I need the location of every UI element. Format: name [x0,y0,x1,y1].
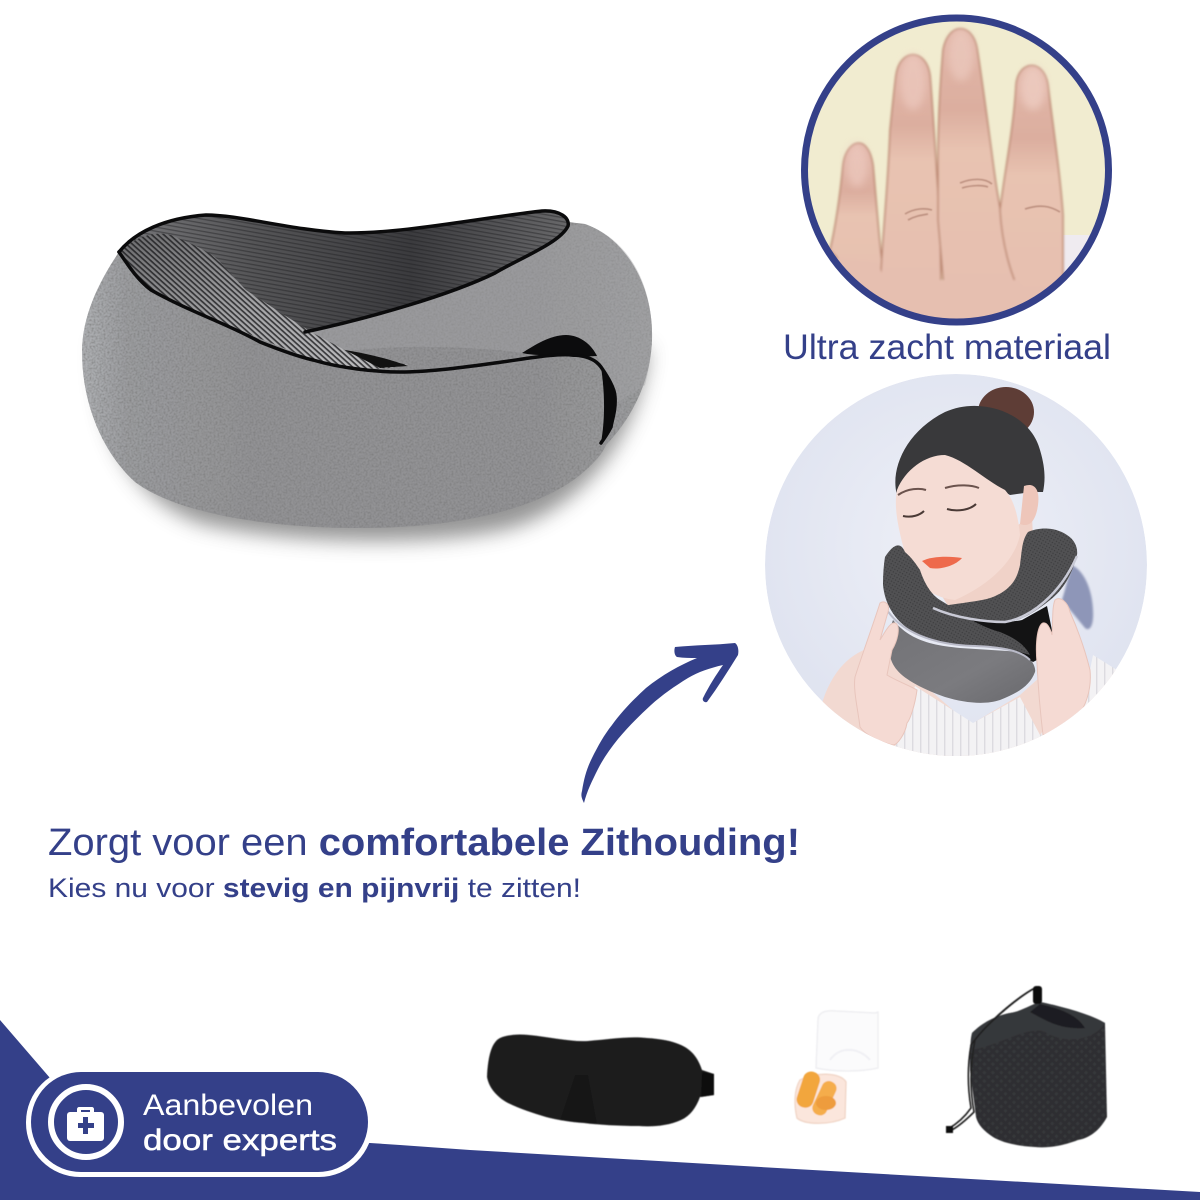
circle photo: woman wearing pillow [765,374,1150,780]
eyes and brows [903,504,976,517]
hair bun [978,387,1034,428]
circle photo: hand pressing soft material [804,18,1108,335]
icon: earplugs in case [795,1011,878,1123]
pillow: black inner [972,606,1052,662]
pillow: right mesh band [948,528,1078,621]
icon: eye mask [487,1034,714,1126]
pillow: grey outer band [888,620,1035,703]
finger: middle [936,26,1014,281]
pillow: left mesh band [883,545,1030,655]
bottom blue band [0,1020,1200,1200]
mouth [922,557,962,569]
product photo: neck pillow [82,205,652,541]
finger: index [1000,65,1063,310]
badge text: Aanbevolen [143,1089,313,1122]
subheadline: Kies nu voor stevig en pijnvrij te zitten! [48,873,581,903]
arrow [581,643,738,803]
white top [895,655,1116,756]
neck [943,521,1033,605]
caption: soft material: Ultra zacht materiaal [783,328,1111,367]
finger: pinky [829,141,883,268]
grey shade behind pillow [1062,565,1093,629]
icon: medical case [51,1087,121,1157]
shoulders [822,650,1115,756]
finger: ring [880,55,941,290]
badge: recommended by experts [26,1068,373,1177]
ear [1020,485,1038,525]
headline: Zorgt voor een comfortabele Zithouding! [48,822,800,864]
hand: left [855,602,917,745]
badge: recommended by experts: door experts [143,1124,337,1157]
hair [895,406,1045,495]
hand: right [1036,599,1090,735]
palm [838,258,1026,318]
face [896,455,1020,600]
icon: drawstring bag [946,986,1107,1147]
